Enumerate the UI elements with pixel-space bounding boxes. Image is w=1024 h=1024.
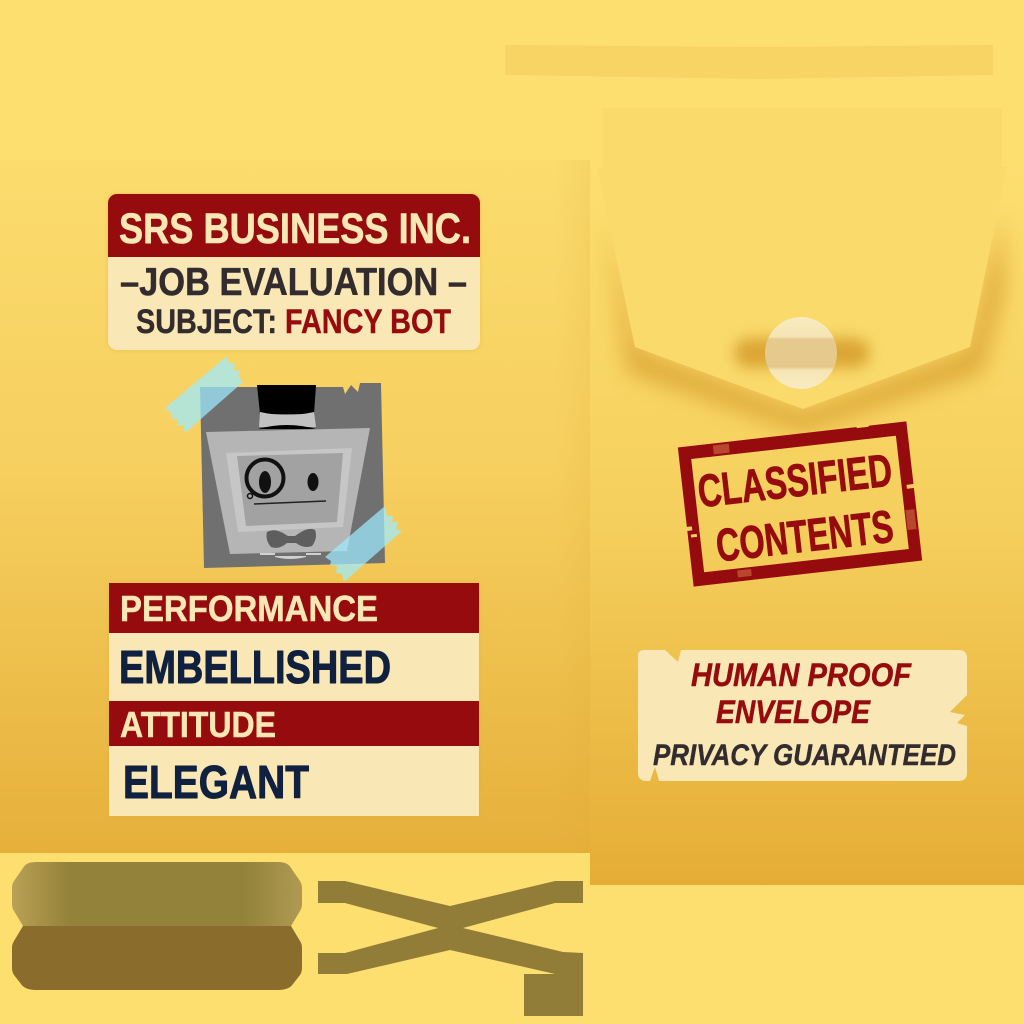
panel: title card: [108, 194, 480, 350]
stamp: classified contents: [676, 419, 924, 587]
stamp wear marks: [676, 419, 924, 583]
note line 2: ENVELOPE: [716, 694, 871, 730]
panel: ratings: [109, 583, 479, 816]
attitude label: ATTITUDE: [120, 704, 276, 745]
button: [765, 317, 837, 389]
top hat: [257, 385, 316, 429]
bow tie: [266, 529, 316, 548]
tape: bottom right: [325, 506, 402, 582]
monocle: [246, 460, 284, 498]
flap shadow: [604, 215, 1004, 432]
screen: [237, 453, 343, 526]
stamp text line 2: CONTENTS: [713, 500, 896, 572]
top strip: [505, 45, 993, 79]
strap band: upper: [12, 862, 302, 926]
note line 1: HUMAN PROOF: [691, 657, 912, 693]
envelope flap: [597, 108, 1007, 409]
neck tab: [260, 553, 321, 559]
title: SRS BUSINESS INC.: [119, 205, 471, 253]
button strap shadow: [734, 338, 870, 368]
attitude header: [109, 701, 479, 746]
attitude value: ELEGANT: [123, 756, 309, 808]
performance header: [109, 583, 479, 633]
performance label: PERFORMANCE: [120, 588, 378, 629]
note line 3: PRIVACY GUARANTEED: [653, 739, 956, 772]
right eye: [308, 473, 318, 491]
strap band: lower: [12, 926, 302, 990]
subtitle: –JOB EVALUATION –: [120, 261, 467, 304]
stamp text line 1: CLASSIFIED: [695, 444, 895, 517]
monitor body: [206, 428, 370, 554]
photo: fancy bot: [200, 383, 385, 568]
note: human proof envelope: [638, 650, 967, 781]
title band: [108, 194, 480, 257]
mouth: [254, 501, 326, 504]
monitor bezel: [226, 448, 352, 532]
panel: right envelope body: [590, 160, 1024, 885]
performance value: EMBELLISHED: [119, 641, 391, 693]
panel: left envelope face: [0, 160, 590, 853]
strap cross: [318, 881, 583, 1016]
tape: top left: [165, 356, 243, 433]
subject line: SUBJECT: FANCY BOT: [136, 303, 451, 341]
